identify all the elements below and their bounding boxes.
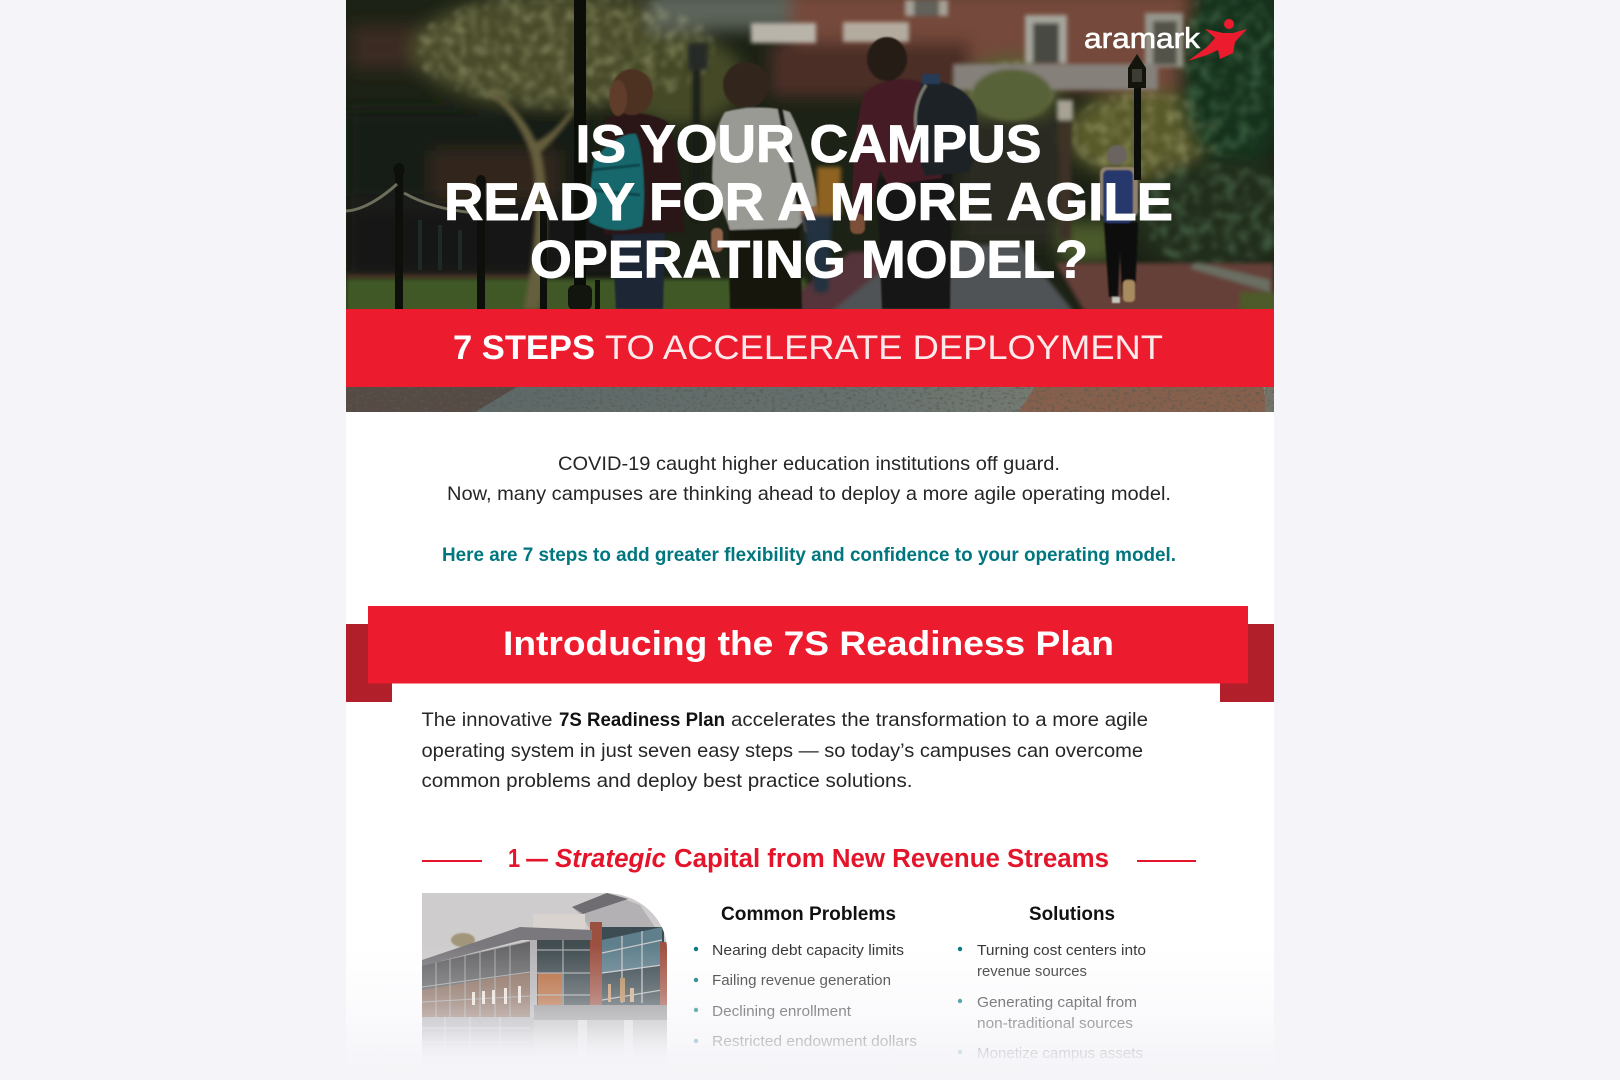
column: common problems: Common Problems — [721, 903, 896, 925]
distant student with blue backpack — [1100, 145, 1138, 303]
logo: aramark — [1084, 19, 1247, 61]
step heading: 1 Strategic Capital — [422, 845, 1196, 873]
title — [444, 115, 1173, 290]
image: campus building — [422, 893, 667, 1049]
icon: red running figure — [1188, 19, 1247, 61]
building details — [751, 23, 816, 43]
bullet list: solutions — [958, 942, 1146, 1062]
campus lamp post — [1128, 54, 1146, 180]
section banner: Introducing the 7S Readiness Plan — [346, 606, 1274, 702]
column: solutions: Solutions — [1029, 903, 1115, 925]
title: OPERATING MODEL? — [530, 230, 1088, 290]
step heading: 1 Strategic Capital: Capital from New Revenue Streams — [674, 845, 1109, 873]
intro text — [447, 453, 1171, 505]
section banner: Introducing the 7S Readiness Plan: Introducing the 7S Readiness Plan — [503, 625, 1114, 663]
bullet list: problems: Declining enrollment — [712, 1003, 852, 1020]
hero photo: students walking on campus — [346, 0, 1300, 415]
student in maroon with black backpack — [850, 37, 978, 309]
bullet list: problems: Restricted endowment dollars — [712, 1033, 917, 1050]
bullet list: problems: Nearing debt capacity limits — [712, 942, 904, 959]
step heading: 1 Strategic Capital: 1 — — [508, 845, 548, 873]
intro paragraph: The innovative — [422, 709, 552, 731]
student with teal backpack — [589, 69, 684, 309]
bullet list: solutions: Turning cost centers into — [977, 942, 1146, 959]
logo: aramark: aramark — [1084, 23, 1201, 55]
bullet list: solutions: non-traditional sources — [977, 1015, 1133, 1032]
panel: white content sheet — [346, 0, 1274, 1080]
ground surfaces — [346, 279, 806, 313]
column: common problems — [694, 903, 917, 1050]
foliage mottling — [415, 0, 1293, 267]
bullet list: problems: Failing revenue generation — [712, 972, 891, 989]
intro paragraph — [422, 709, 1148, 792]
intro text: COVID-19 caught higher education institutions off guard. — [558, 453, 1060, 475]
column: solutions — [958, 903, 1146, 1062]
tree trunk — [490, 91, 574, 309]
bottom fade overlay — [0, 945, 1620, 1080]
teal callout sentence: Here are 7 steps to add greater flexibility and confidence to your operating model. — [442, 544, 1176, 566]
subtitle text: TO ACCELERATE DEPLOYMENT — [605, 329, 1163, 367]
bullet list: problems — [694, 942, 917, 1050]
fence posts and chain — [346, 0, 600, 310]
paving strip below the banner — [346, 387, 1274, 412]
bullet list: solutions: revenue sources — [977, 963, 1087, 980]
bullet list: solutions: Generating capital from — [977, 994, 1137, 1011]
intro paragraph: operating system in just seven easy steps — so today’s campuses can overcome — [422, 740, 1143, 762]
step heading: 1 Strategic Capital: Strategic — [555, 845, 666, 873]
title: READY FOR A MORE AGILE — [444, 173, 1173, 232]
intro paragraph: 7S Readiness Plan — [559, 709, 725, 731]
red banner: 7 steps subtitle — [346, 309, 1274, 387]
background student in yellow — [802, 167, 841, 292]
bullet list: solutions: Monetize campus assets — [977, 1045, 1143, 1062]
title: IS YOUR CAMPUS — [576, 115, 1042, 174]
intro paragraph: common problems and deploy best practice solutions. — [422, 770, 912, 792]
intro text: Now, many campuses are thinking ahead to deploy a more agile operating model. — [447, 483, 1171, 505]
subtitle text: 7 STEPS — [453, 329, 595, 367]
intro paragraph: accelerates the transformation to a more agile — [731, 709, 1148, 731]
student in white shirt — [711, 62, 825, 309]
